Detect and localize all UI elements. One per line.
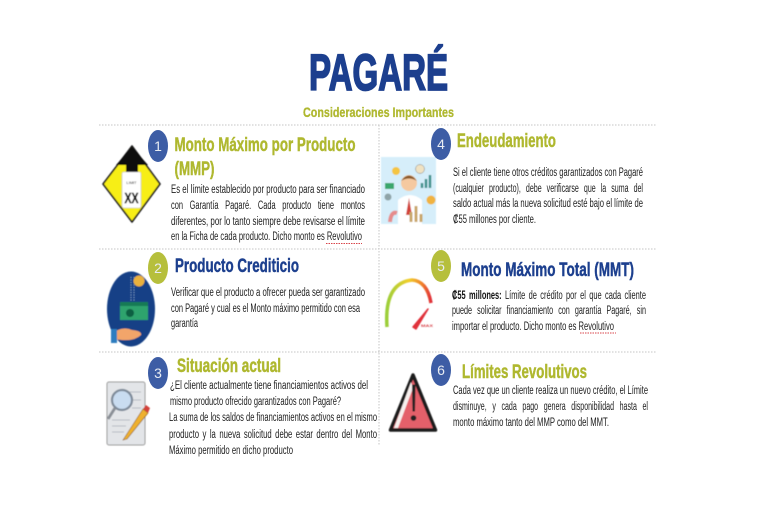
panel 2: Producto Crediticio <box>107 252 365 346</box>
body text: disminuye, y cada pago genera disponibilidad hasta el <box>453 401 648 413</box>
heading: Monto Máximo por Producto <box>174 135 356 156</box>
panel 6: Límites Revolutivos <box>390 354 648 430</box>
number badge 2: 2 <box>154 260 162 276</box>
body text: importar el producto. Dicho monto es Revolutivo <box>452 321 614 333</box>
number badge 6: 6 <box>437 362 445 378</box>
icon: money over hand <box>107 272 155 346</box>
body text: saldo actual más la nueva solicitud esté bajo el límite de <box>453 198 643 210</box>
icon: document with magnifier and pencil <box>107 382 150 445</box>
number badge 5 <box>431 250 451 282</box>
body text <box>169 380 377 457</box>
heading: Producto Crediticio <box>175 256 299 277</box>
body text: Verificar que el producto a ofrecer pueda ser garantizado <box>171 287 365 299</box>
body text: Máximo permitido en dicho producto <box>169 445 293 457</box>
icon: limit road sign <box>103 146 160 222</box>
body text: ₡55 millones: Límite de crédito por el que cada cliente <box>452 290 646 302</box>
icon: limit road sign: LIMIT <box>126 180 137 185</box>
number badge 4 <box>431 128 451 160</box>
icon: limit road sign: XX <box>124 190 138 207</box>
icon: warning triangle <box>390 375 436 430</box>
body text: con Pagaré y cual es el Monto máximo permitido con esa <box>171 303 360 315</box>
body text: Cada vez que un cliente realiza un nuevo crédito, el Límite <box>453 385 648 397</box>
number badge 6 <box>431 354 451 386</box>
panel 4: Endeudamiento <box>381 128 643 226</box>
heading: (MMP) <box>174 159 214 180</box>
body text: producto y la nueva solicitud debe estar dentro del Monto <box>169 429 377 441</box>
body text <box>171 184 365 244</box>
heading: Límites Revolutivos <box>462 362 587 383</box>
icon: speedometer gauge: MAX <box>421 323 433 328</box>
heading: Monto Máximo Total (MMT) <box>461 260 634 281</box>
heading <box>174 135 356 180</box>
number badge 1 <box>148 130 168 162</box>
number badge 3: 3 <box>154 365 162 381</box>
body text: Si el cliente tiene otros créditos garantizados con Pagaré <box>453 167 643 179</box>
body text: monto máximo tanto del MMP como del MMT. <box>453 417 609 429</box>
body text: diferentes, por lo tanto siempre debe revisarse el límite <box>171 216 365 228</box>
body text <box>171 287 365 330</box>
body text: garantía <box>171 318 198 330</box>
panel 1: Monto Máximo por Producto <box>103 130 365 244</box>
body text <box>453 385 648 429</box>
number badge 3 <box>148 357 168 389</box>
body text: Es el límite establecido por producto para ser financiado <box>171 184 365 196</box>
panel 3: Situación actual <box>107 356 377 457</box>
number badge 2 <box>148 252 168 284</box>
number badge 1: 1 <box>154 138 162 154</box>
body text: con Garantía Pagaré. Cada producto tiene montos <box>171 200 365 212</box>
subtitle: Consideraciones Importantes <box>303 104 454 120</box>
title: PAGARÉ <box>309 44 448 101</box>
number badge 4: 4 <box>437 136 445 152</box>
body text: mismo producto ofrecido garantizados con Pagaré? <box>170 396 341 408</box>
icon: businessman with finance symbols <box>381 157 436 224</box>
number badge 5: 5 <box>437 258 445 274</box>
panel 5: Monto Máximo Total (MMT) <box>387 250 646 333</box>
icon: speedometer gauge <box>387 280 433 329</box>
heading: Endeudamiento <box>457 131 556 152</box>
body text: en la Ficha de cada producto. Dicho monto es Revolutivo <box>171 231 362 243</box>
body text: ₡55 millones por cliente. <box>453 214 536 226</box>
body text: La suma de los saldos de financiamientos activos en el mismo <box>169 412 377 424</box>
body text: (cualquier producto), debe verificarse que la suma del <box>453 183 643 195</box>
body text: ¿El cliente actualmente tiene financiamientos activos del <box>170 380 368 392</box>
heading: Situación actual <box>177 356 281 377</box>
body text: puede solicitar financiamiento con garantía Pagaré, sin <box>452 305 646 317</box>
body text <box>452 290 646 333</box>
body text <box>453 167 643 226</box>
